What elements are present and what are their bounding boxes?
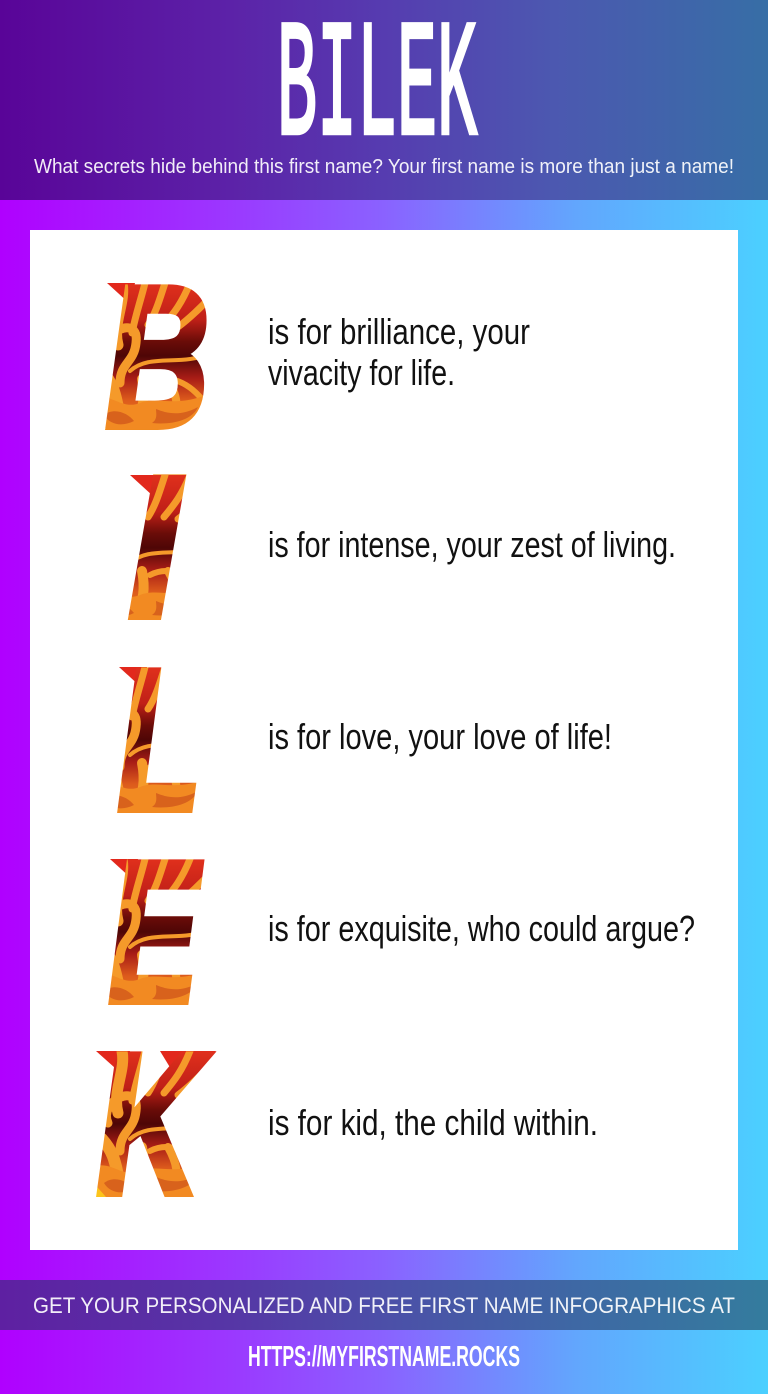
footer band (0, 1280, 768, 1330)
icon: flame letter E: E (109, 821, 202, 1044)
row B (106, 246, 530, 469)
icon: flame letter B: B (106, 246, 209, 469)
row I (129, 436, 676, 659)
text: K meaning: is for kid, the child within. (268, 1102, 598, 1143)
icon: flame letter I: I (129, 436, 182, 659)
subtitle: What secrets hide behind this first name? Your first name is more than just a name! (34, 156, 734, 178)
text: B meaning (268, 311, 530, 393)
icon: flame letter K: K (97, 1013, 209, 1236)
text: I meaning: is for intense, your zest of living. (268, 524, 676, 565)
text: B meaning: vivacity for life. (268, 352, 455, 393)
text: L meaning: is for love, your love of life! (268, 716, 612, 757)
icon: flame letter L (118, 629, 201, 852)
row L (118, 629, 612, 852)
text: B meaning: is for brilliance, your (268, 311, 530, 352)
row E (109, 821, 695, 1044)
icon: flame letter E (109, 821, 202, 1044)
row K (96, 1013, 598, 1236)
footer call to action: GET YOUR PERSONALIZED AND FREE FIRST NAME INFOGRAPHICS AT (33, 1293, 735, 1318)
header band: BILEK (277, 0, 477, 183)
icon: flame letter L: L (118, 629, 201, 852)
white content panel (30, 230, 738, 1250)
footer url: HTTPS://MYFIRSTNAME.ROCKS (248, 1341, 520, 1373)
header band (0, 0, 768, 200)
